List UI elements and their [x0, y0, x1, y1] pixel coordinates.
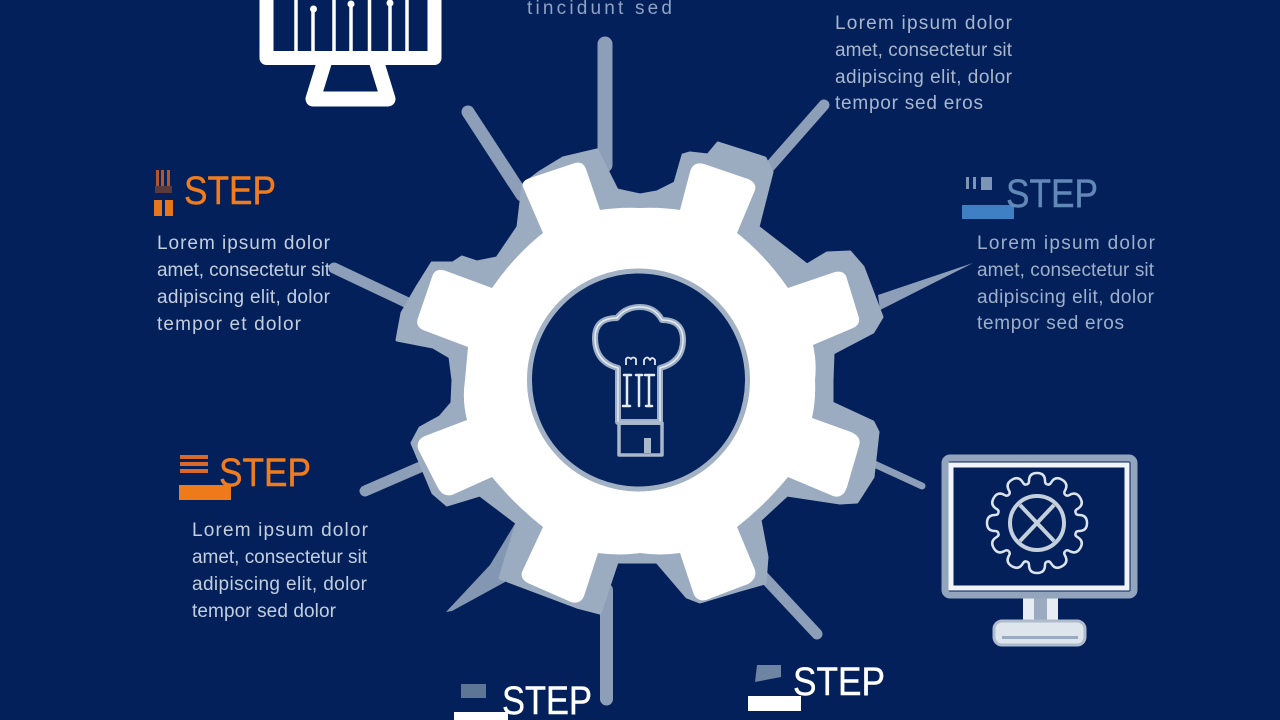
- body text: Lorem ipsum dolor: [157, 233, 331, 254]
- heading: STEP: [1006, 172, 1098, 216]
- icon: white step marker: [755, 665, 781, 682]
- body text: tempor et dolor: [157, 314, 302, 335]
- text block: top right: adipiscing elit, dolor: [835, 67, 1013, 88]
- icon: white step marker: [454, 684, 508, 720]
- body text: amet, consectetur sit: [157, 260, 331, 281]
- central gear: [417, 163, 860, 603]
- body text: amet, consectetur sit: [192, 547, 368, 568]
- gear shadow: [397, 143, 882, 613]
- body text: [157, 233, 331, 335]
- icon: lower-right monitor with gear: [945, 458, 1134, 645]
- body text: adipiscing elit, dolor: [192, 574, 368, 595]
- body text: amet, consectetur sit: [977, 260, 1155, 281]
- heading: STEP: [793, 660, 885, 704]
- heading: STEP: [184, 169, 276, 213]
- body text: tempor sed eros: [977, 313, 1124, 334]
- icon: top-left monitor with chart: [266, 0, 434, 99]
- body text: Lorem ipsum dolor: [192, 520, 369, 541]
- heading: STEP: [219, 451, 311, 495]
- icon: blue step marker: [962, 177, 1014, 219]
- step: bottom right: [748, 660, 885, 711]
- icon: orange step marker: [154, 170, 173, 216]
- step: upper right: [962, 172, 1156, 334]
- body text: tempor sed dolor: [192, 601, 337, 622]
- body text: [977, 233, 1156, 334]
- icon: orange step marker: [179, 455, 231, 500]
- body text: adipiscing elit, dolor: [977, 287, 1155, 308]
- body text: adipiscing elit, dolor: [157, 287, 331, 308]
- monitor stand: [994, 596, 1085, 645]
- text block: top right: amet, consectetur sit: [835, 40, 1013, 61]
- step: upper left: [154, 169, 331, 335]
- tapered spoke: lower left: [446, 522, 516, 612]
- monitor frame: [945, 458, 1134, 595]
- text block: top right: [835, 13, 1013, 114]
- step: bottom centre: [454, 679, 592, 720]
- gear outline: [987, 473, 1087, 573]
- body text: [192, 520, 369, 622]
- step: lower left: [179, 451, 369, 622]
- text block: top right: tempor sed eros: [835, 93, 983, 114]
- text block: top right: Lorem ipsum dolor: [835, 13, 1013, 34]
- gear hub circle: [530, 271, 748, 489]
- tapered spoke: right: [878, 263, 973, 310]
- icon: chef hat with utensils: [595, 307, 683, 455]
- connector spokes: [334, 44, 922, 699]
- body text: Lorem ipsum dolor: [977, 233, 1156, 254]
